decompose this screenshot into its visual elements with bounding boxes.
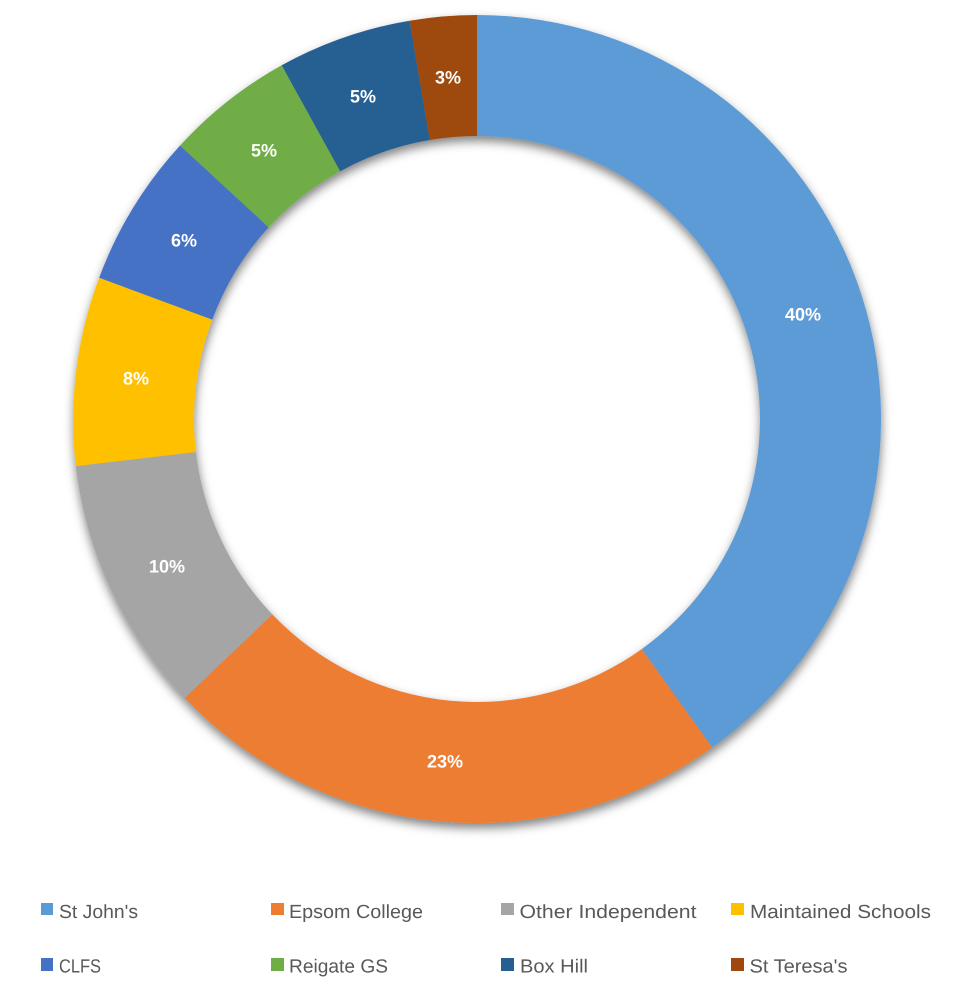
label: 40%: 40% [785,304,821,324]
label: 5% Reigate GS: 5% [251,140,277,160]
label: 6%: 6% [171,230,197,250]
segment: Other Independent [76,452,272,698]
segment: Epsom College [185,614,712,823]
legend item: Maintained Schools: Maintained Schools [750,902,931,923]
label: 3%: 3% [435,68,461,88]
legend item: CLFS [41,956,101,978]
legend [41,902,931,978]
label: 10%: 10% [149,556,185,576]
label: 23%: 23% [427,752,463,772]
segment: Box Hill [282,21,430,171]
segment: Maintained Schools [73,278,212,466]
segment: St Teresa's [410,15,477,140]
data labels [123,68,821,772]
label: 8%: 8% [123,368,149,388]
segment: St John's [477,15,881,747]
donut ring [73,15,881,823]
legend item: CLFS: CLFS [59,956,101,978]
legend item: Reigate GS: Reigate GS [289,956,388,978]
legend item: Other Independent: Other Independent [520,902,697,923]
legend item: Box Hill: Box Hill [520,956,588,978]
legend item: Epsom College: Epsom College [289,902,423,923]
segment: CLFS [99,146,269,320]
legend item: St John's: St John's [59,902,138,923]
legend item: St Teresa's: St Teresa's [750,956,848,978]
segment: Reigate GS [180,65,340,227]
label: 5% Box Hill: 5% [350,86,376,106]
